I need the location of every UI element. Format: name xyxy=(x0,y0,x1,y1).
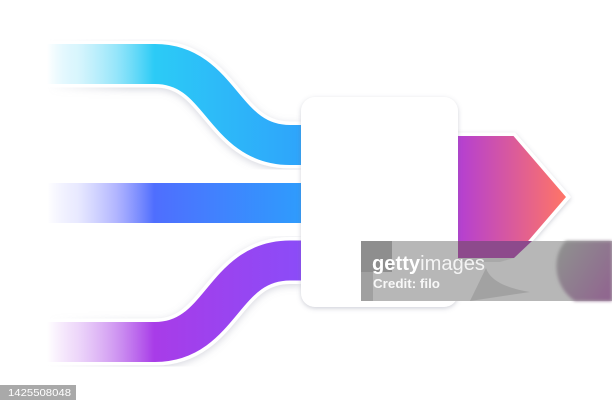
image id tag: 1425508048 xyxy=(8,387,71,399)
band: purple bottom stream xyxy=(47,260,302,342)
watermark text: credit: Credit: filo xyxy=(373,277,440,291)
arrow: output pointing right xyxy=(450,132,571,262)
band: blue middle stream xyxy=(56,183,301,223)
watermark: gettyimages banner xyxy=(361,241,612,301)
image id tag xyxy=(0,385,76,400)
panel: central white card xyxy=(301,97,458,307)
band: cyan top stream xyxy=(47,64,302,145)
watermark text: gettyimages: gettyimages xyxy=(372,252,485,275)
